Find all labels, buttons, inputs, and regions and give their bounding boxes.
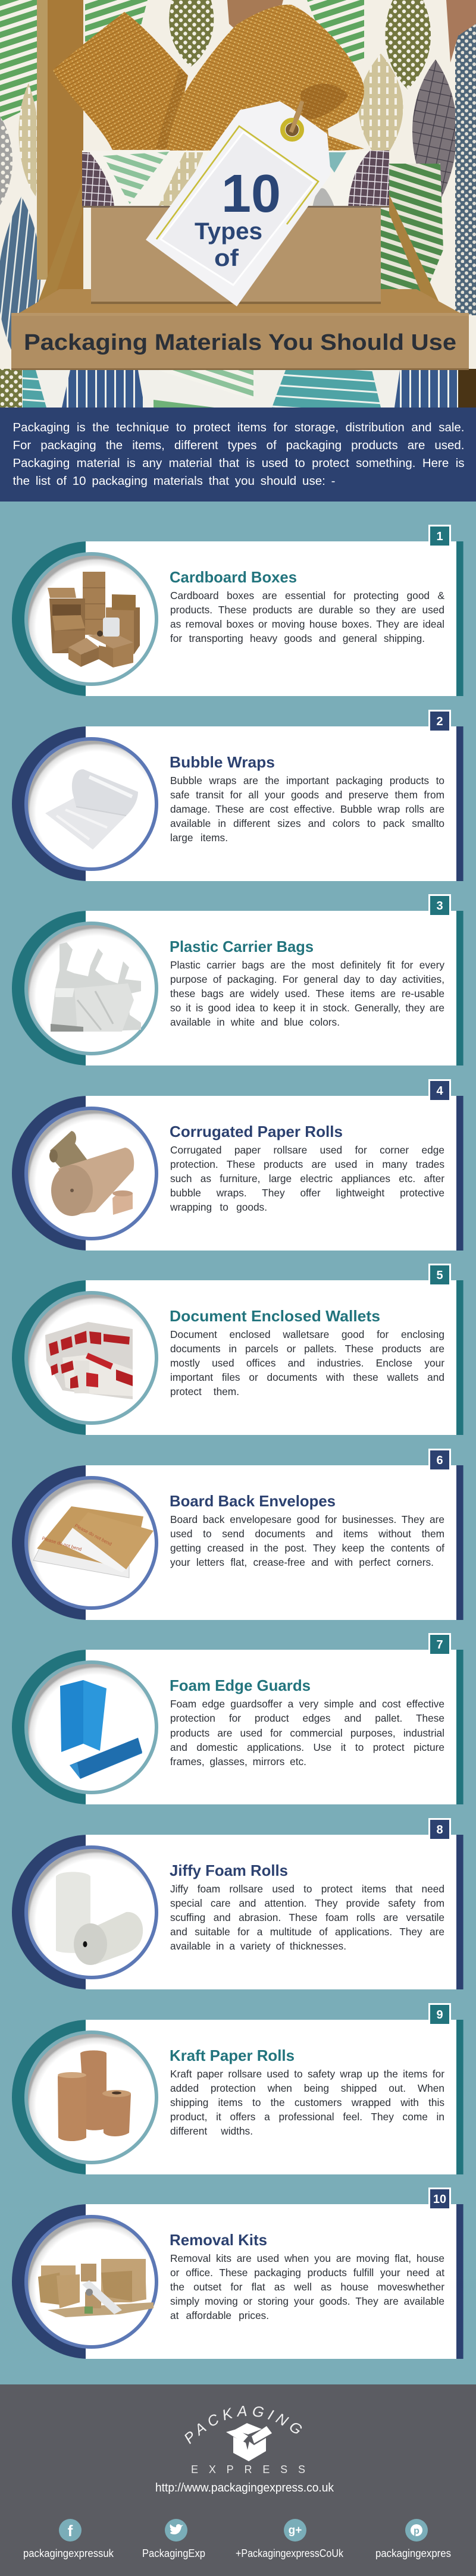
ribbon bow [53,5,364,152]
number badge [428,894,451,915]
icon: kraft paper rolls [58,2050,131,2141]
number badge: 6 [436,1454,443,1467]
social: pinterest: p [414,2526,419,2536]
number badge [428,1818,451,1839]
intro text panel: For packaging the items, different types of packaging products are used. [13,438,464,452]
body text: large items. [170,832,228,844]
body text: special care and attention. They provide safety from [170,1897,444,1909]
body text: Board back envelopesare good for businesses. They are [170,1513,444,1525]
body text [170,959,444,1028]
body text: for transporting heavy goods and general shipping. [170,632,425,644]
body text: shipping items to the customers wrapped with this [170,2096,444,2108]
social: twitter [142,2519,205,2559]
heading: Board Back Envelopes [170,1492,336,1510]
intro text panel: Packaging material is any material that is used to protect something. Here is [13,456,464,470]
body text: added protection when being shipped out. When [170,2082,444,2094]
body text: Kraft paper rollsare used to safety wrap up the items for [170,2068,444,2080]
body text: documents in parcels or pallets. These products are [170,1343,444,1355]
body text: mostly used offices and industries. Enclose your [170,1357,444,1369]
number badge: 4 [436,1085,443,1098]
icon: board back envelopes [33,1506,154,1578]
panel: 10 removal kits [12,2188,464,2359]
icon: board back envelopes: Please do not bend [41,1535,82,1552]
heading: Plastic Carrier Bags [170,938,314,955]
number badge: 7 [436,1638,443,1651]
hero photo: gift boxes with ribbon and tag [0,0,476,408]
tag number: 10 [221,164,281,224]
tag text: of: of [214,245,239,271]
social: google plus: +PackagingexpressCoUk [236,2547,344,2559]
body text: safe transit for all your goods and preserve them from [170,789,444,801]
body text [170,1513,444,1568]
social: facebook [23,2519,114,2559]
body text: Removal kits are used when you are moving flat, house [170,2252,444,2264]
body text [170,1883,444,1952]
number badge [428,2188,451,2208]
panel: 5 document enclosed wallets [12,1264,464,1435]
body text: getting creased in the post. They keep the contents of [170,1542,444,1554]
number badge: 10 [433,2193,446,2206]
body text: the outset for flat as well as house moveswhether [170,2281,444,2293]
body text [170,2252,444,2321]
intro text panel: Packaging is the technique to protect items for storage, distribution and sale. [13,421,464,434]
body text: damage. These are cost effective. Bubble wrap rolls are [170,803,444,815]
body text: so it is good idea to keep it in stock. Generally, they are [170,1002,444,1014]
number badge [428,1633,451,1654]
icon: foam edge guards [60,1680,142,1779]
social: facebook: f [68,2522,73,2540]
logo text: Express: EXPRESS [191,2464,305,2475]
heading: Foam Edge Guards [170,1676,311,1694]
heading: Jiffy Foam Rolls [170,1862,288,1879]
panel: 8 jiffy foam rolls [12,1818,464,1989]
body text: available in different sizes and colors to pack smallto [170,817,444,829]
body text: your letters flat, crease-free and with perfect corners. [170,1556,434,1568]
body text: and suitable for a multitude of applications. They are [170,1926,444,1938]
icon: cardboard boxes [48,572,140,667]
icon: bubble wrap roll [45,769,138,850]
logo [184,2406,305,2475]
social: google plus [236,2519,344,2559]
body text: available in white and blue colors. [170,1016,340,1028]
panel: 9 kraft paper rolls [12,2003,464,2174]
social: pinterest [375,2519,451,2559]
body text: Foam edge guardsoffer a very simple and cost effective [170,1698,444,1710]
panel: 2 bubble wraps [12,710,464,881]
social: twitter: PackagingExp [142,2547,205,2559]
body text [170,2068,444,2137]
wallpaper background [0,0,476,408]
number badge [428,1449,451,1469]
number badge: 8 [436,1823,443,1837]
body text: important files or documents with these wallets and [170,1371,444,1383]
heading: Corrugated Paper Rolls [170,1123,343,1140]
body text: protection for product edges and pallet. These [170,1712,444,1724]
body text [170,775,444,844]
social: pinterest: packagingexpres [375,2547,451,2559]
body text: used to send documents and items without them [170,1528,444,1540]
body text: Bubble wraps are the important packaging products to [170,775,444,786]
number badge: 9 [436,2008,443,2022]
middle kraft box [91,208,381,304]
body text: and domestic applications. Use it to protect picture [170,1741,444,1753]
body text: products are used for commercial purposes, industrial [170,1727,444,1739]
icon: removal kit [38,2259,154,2317]
body text: purpose of packaging. For general day to day activities, [170,973,444,985]
body text: frames, glasses, mirrors etc. [170,1756,306,1768]
patterned box lid [82,151,389,208]
body text: such as furniture, large electric appliances etc. after [170,1173,444,1184]
heading: Cardboard Boxes [170,568,297,586]
body text: as removal boxes or moving house boxes. They are ideal [170,618,444,630]
number badge [428,2002,451,2024]
body text: different widths. [170,2125,253,2137]
icon: document wallets [45,1322,133,1399]
number badge [428,710,451,731]
logo text: Packaging: PACKAGING [184,2406,302,2444]
body text: Cardboard boxes are essential for protecting good & [170,590,444,601]
side straps [38,182,439,302]
body text: these bags are widely used. These items are re-usable [170,988,444,999]
icon: board back envelopes: Please do not bend [74,1523,112,1547]
body text: scuffing and abrasion. These foam rolls are versatile [170,1911,444,1923]
bottom wrapping paper strip [0,369,476,408]
body text: Document enclosed walletsare good for enclosing [170,1328,444,1340]
main title: Packaging Materials You Should Use [24,330,456,355]
bottom kraft box [11,289,469,370]
number badge: 5 [436,1269,443,1282]
body text: products. These products are durable so they are used [170,604,444,616]
body text: available in a variety of thicknesses. [170,1940,346,1952]
body text: Jiffy foam rollsare used to protect items that need [170,1883,444,1895]
website url: http://www.packagingexpress.co.uk [155,2481,334,2494]
panel: 7 foam edge guards [12,1633,464,1804]
number badge [428,1079,451,1100]
tag text: Types: Types [195,218,262,245]
heading: Bubble Wraps [170,753,275,771]
social: google plus: g+ [289,2524,302,2537]
number badge: 1 [436,530,443,543]
body text: at affordable prices. [170,2309,269,2321]
heading: Removal Kits [170,2231,267,2249]
body text: Corrugated paper rollsare used for corner edge [170,1144,444,1156]
gift tag [146,101,331,306]
panel: footer [0,2384,476,2576]
body text: simply moving or storing your goods. They are available [170,2295,444,2307]
icon: plastic carrier bags [51,942,141,1032]
intro text panel [0,408,476,502]
icon: open box [226,2423,272,2461]
body text: product, it offers a professional feel. They come in [170,2111,444,2123]
panel: 4 corrugated paper rolls [12,1079,464,1251]
body text [170,1144,444,1213]
body text [170,1328,444,1397]
panel: 1 cardboard boxes [12,525,464,696]
heading: Kraft Paper Rolls [170,2047,295,2064]
body text: Plastic carrier bags are the most definitely fit for every [170,959,444,971]
number badge [428,1264,451,1284]
icon: jiffy foam rolls [56,1872,143,1965]
panel: 3 plastic carrier bags [12,894,464,1066]
social: facebook: packagingexpressuk [23,2547,114,2559]
intro text panel: the list of 10 packaging materials that you should use: - [13,474,336,488]
body text [170,590,444,644]
body text: or office. These packaging products fulfill your need at [170,2267,444,2279]
body text: protect them. [170,1386,239,1397]
heading: Document Enclosed Wallets [170,1307,380,1325]
body text [170,1698,444,1768]
body text: wrapping to goods. [170,1201,267,1213]
number badge [428,525,451,546]
number badge: 2 [436,715,443,728]
number badge: 3 [436,900,443,913]
body text: bubble wraps. They offer lightweight protective [170,1187,444,1199]
panel: 6 board back envelopes [12,1449,464,1620]
body text: protection. These products are used in many trades [170,1158,444,1170]
icon: corrugated rolls [49,1131,134,1216]
